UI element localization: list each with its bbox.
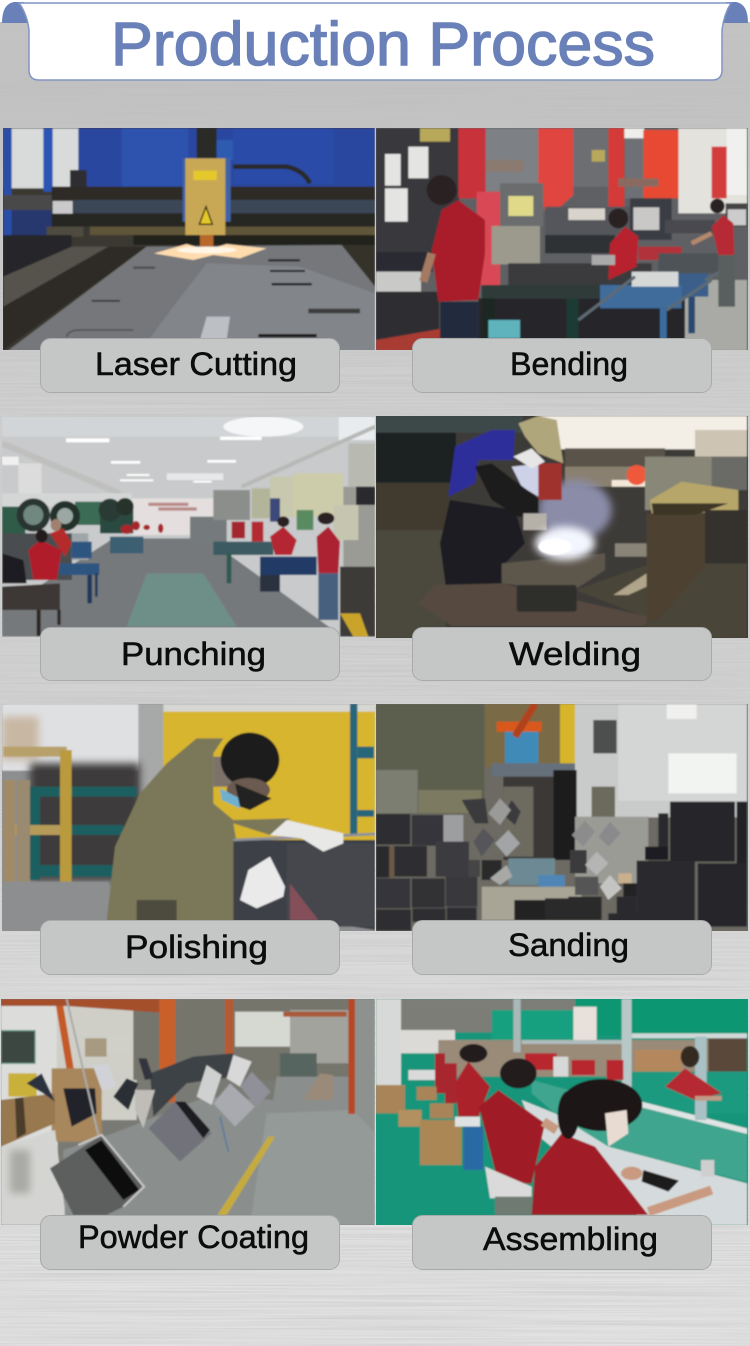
photo: polishing — [0, 700, 375, 933]
panel: welding — [375, 410, 750, 680]
title: Production Process — [111, 10, 655, 78]
photo: laser cutting — [0, 120, 375, 353]
panel: sanding — [375, 700, 750, 974]
header banner — [2, 2, 748, 80]
panel: bending — [375, 120, 750, 392]
photo: powder coating — [0, 990, 375, 1227]
photo: welding — [375, 410, 750, 643]
panel: laser cutting — [0, 120, 375, 392]
label: laser cutting — [40, 338, 340, 392]
label: sanding — [412, 920, 712, 974]
photo: sanding — [375, 700, 750, 933]
heading: sanding: Sanding — [508, 927, 629, 963]
heading: punching: Punching — [121, 636, 266, 672]
heading: laser cutting: Laser Cutting — [95, 346, 297, 382]
heading: powder coating: Powder Coating — [78, 1219, 309, 1255]
label: punching — [40, 628, 340, 680]
heading: assembling: Assembling — [483, 1221, 658, 1257]
heading: welding: Welding — [509, 636, 641, 672]
label: powder coating — [40, 1216, 340, 1270]
heading: polishing: Polishing — [125, 929, 268, 965]
photo: punching — [0, 410, 375, 643]
photo: bending — [375, 120, 750, 353]
panel: assembling — [375, 990, 750, 1270]
heading: bending: Bending — [510, 346, 628, 382]
photo: assembling — [375, 990, 750, 1227]
panel: powder coating — [0, 990, 375, 1270]
label: welding — [412, 628, 712, 680]
panel: polishing — [0, 700, 375, 974]
label: assembling — [412, 1216, 712, 1270]
label: polishing — [40, 920, 340, 974]
panel: punching — [0, 410, 375, 680]
label: bending — [412, 338, 712, 392]
